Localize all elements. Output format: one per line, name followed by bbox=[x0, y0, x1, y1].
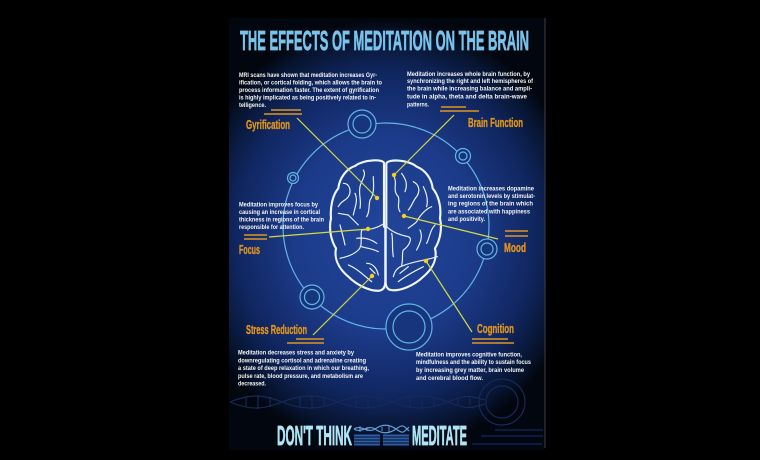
mood text bbox=[448, 186, 535, 223]
stress reduction heading: Stress Reduction bbox=[246, 322, 307, 337]
gyrification text: ification, or cortical folding, which allows the brain to bbox=[239, 80, 382, 86]
section: cognition bbox=[416, 259, 531, 382]
cognition text: Meditation improves cognitive function, bbox=[416, 352, 522, 358]
large orbit ring bbox=[283, 123, 489, 329]
cognition text: mindfulness and the ability to sustain focus bbox=[416, 359, 531, 366]
section: gyrification bbox=[239, 72, 382, 200]
ring node: bottom bbox=[386, 304, 432, 350]
ring node: right bbox=[477, 239, 497, 259]
faint DNA background graphic bbox=[230, 379, 543, 444]
brain function heading: Brain Function bbox=[468, 115, 523, 130]
mood text: and positivity. bbox=[448, 216, 485, 223]
brain function text bbox=[407, 71, 534, 108]
focus text: Meditation improves focus by bbox=[239, 202, 318, 208]
mood text: and serotonin levels by stimulat- bbox=[448, 193, 535, 200]
stress reduction text: a state of deep relaxation in which our breathing, bbox=[238, 365, 369, 372]
focus pointer bbox=[269, 227, 370, 237]
gyrification pointer bbox=[297, 118, 379, 200]
cognition text: and cerebral blood flow. bbox=[416, 375, 483, 382]
cognition text bbox=[416, 352, 531, 382]
mood text: Meditation increases dopamine bbox=[448, 186, 534, 192]
stress reduction text: decreased. bbox=[238, 380, 266, 388]
mood text: are associated with happiness bbox=[448, 208, 530, 216]
focus text: thickness in regions of the brain bbox=[239, 216, 324, 224]
gyrification text: telligence. bbox=[239, 102, 266, 109]
ring node: bottom left bbox=[300, 285, 324, 309]
cognition accent bars bbox=[472, 339, 514, 343]
brain function accent bars bbox=[440, 107, 479, 111]
brain illustration bbox=[330, 160, 441, 291]
section: stress reduction bbox=[238, 274, 374, 388]
mood text: ing regions of the brain which bbox=[448, 200, 533, 208]
gyrification text: is highly implicated as being positively related to in- bbox=[239, 94, 376, 102]
poster content: MEDITATE bbox=[412, 420, 467, 451]
mood pointer bbox=[402, 214, 498, 239]
focus heading: Focus bbox=[239, 242, 260, 257]
brain function text: Meditation increases whole brain function, by bbox=[407, 71, 530, 78]
poster content bbox=[230, 25, 543, 451]
cognition heading: Cognition bbox=[477, 321, 514, 336]
footer slogan: DON'T THINK bbox=[277, 420, 352, 451]
cognition pointer bbox=[424, 259, 472, 332]
brain function text: the brain while increasing balance and ampli- bbox=[407, 86, 532, 92]
cognition text: by increasing grey matter, brain volume bbox=[416, 367, 524, 374]
section: brain function bbox=[392, 71, 534, 177]
section: focus bbox=[239, 202, 370, 257]
brain function text: synchronizing the right and left hemispheres of bbox=[407, 78, 534, 85]
mood heading: Mood bbox=[504, 240, 526, 255]
focus text: causing an increase in cortical bbox=[239, 209, 320, 216]
brain function text: patterns. bbox=[407, 102, 429, 108]
gyrification text: MRI scans have shown that meditation increases Gyr- bbox=[239, 72, 377, 79]
gyrification accent bars bbox=[264, 110, 302, 114]
stress reduction text: downregulating cortisol and adrenaline creating bbox=[238, 358, 366, 364]
icon: DNA helix with stripes bbox=[354, 425, 409, 444]
gyrification heading: Gyrification bbox=[246, 117, 290, 132]
focus accent bars bbox=[244, 235, 267, 239]
focus text: responsible for attention. bbox=[239, 224, 304, 231]
gyrification text: process information faster. The extent of gyrification bbox=[239, 87, 379, 94]
ring node: top right bbox=[456, 148, 470, 164]
ring node: left bbox=[288, 172, 298, 184]
gyrification text bbox=[239, 72, 382, 109]
stress reduction text bbox=[238, 350, 369, 388]
focus text bbox=[239, 202, 324, 231]
stress reduction text: Meditation decreases stress and anxiety by bbox=[238, 350, 354, 356]
ring node: top left bbox=[348, 110, 376, 138]
section: mood bbox=[402, 186, 535, 255]
stress reduction accent bars bbox=[287, 339, 324, 343]
stress reduction pointer bbox=[313, 274, 374, 335]
mood accent bars bbox=[505, 231, 528, 236]
brain function pointer bbox=[392, 115, 454, 177]
brain function text: tude in alpha, theta and delta brain-wave bbox=[407, 94, 527, 100]
stress reduction text: pulse rate, blood pressure, and metabolism are bbox=[238, 373, 363, 380]
